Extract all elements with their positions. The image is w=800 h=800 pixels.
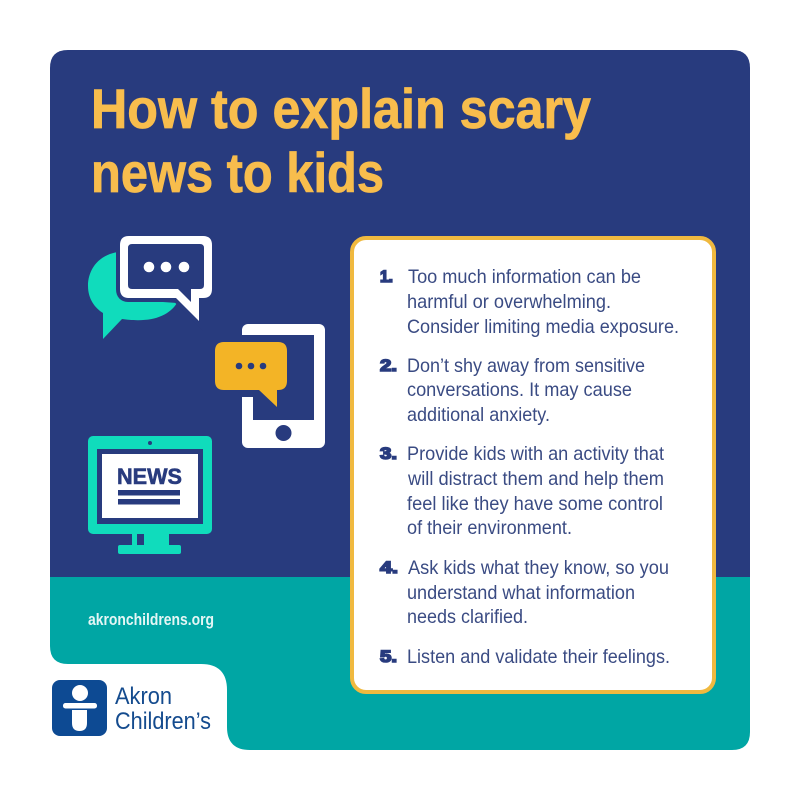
icon: chat bubbles [88,236,212,339]
tip 1 [380,266,679,338]
tip 4: 4. [380,559,398,577]
icon: news monitor [88,436,212,554]
title [91,77,591,204]
tip 1: Consider limiting media exposure. [407,316,679,338]
tip 4: Ask kids what they know, so you [408,557,669,579]
tip 3: will distract them and help them [407,468,664,490]
logo: Akron Children's: Akron [115,683,172,710]
tip 2: 2. [380,357,397,375]
tip 2: Don’t shy away from sensitive [407,355,645,377]
tip 1: Too much information can be [408,266,641,288]
tip 5: Listen and validate their feelings. [407,646,670,668]
tip 2 [380,355,645,426]
tip 4: understand what information [407,582,635,604]
tip 3: 3. [380,445,397,463]
tip 5: 5. [380,648,397,666]
tip 3: feel like they have some control [407,493,663,515]
tip 4 [380,557,669,628]
tip 2: conversations. It may cause [407,379,632,401]
tip 3: of their environment. [407,517,572,539]
background panel [50,50,750,750]
logo: Akron Children's [52,680,211,736]
tip 3 [380,443,665,539]
tip 4: needs clarified. [407,606,528,628]
icon: phone with message [215,324,325,448]
tip 2: additional anxiety. [407,404,550,426]
title: news to kids [91,141,384,204]
icon: news monitor: NEWS [117,464,182,489]
panel: tips list [352,238,714,692]
tip 3: Provide kids with an activity that [407,443,665,465]
title: How to explain scary [91,77,591,140]
logo: Akron Children's: Children’s [115,708,211,735]
tip 1: harmful or overwhelming. [407,291,611,313]
website url: akronchildrens.org [88,611,214,629]
tip 1: 1. [380,268,393,286]
